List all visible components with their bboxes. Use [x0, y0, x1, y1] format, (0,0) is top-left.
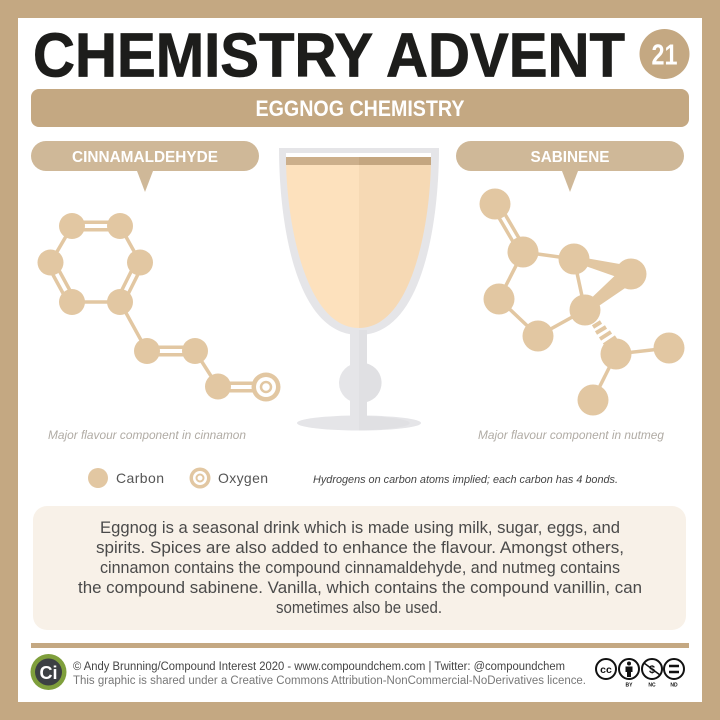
- description panel: the compound sabinene. Vanilla, which contains the compound vanillin, can: [78, 579, 642, 597]
- eggnog glass: [279, 148, 439, 430]
- icon: by: BY: [626, 682, 633, 688]
- logo: Ci: [40, 663, 58, 683]
- credits: This graphic is shared under a Creative Commons Attribution-NonCommercial-NoDerivatives licence.: [73, 675, 586, 687]
- icon: nd: ND: [670, 682, 678, 688]
- description panel: cinnamon contains the compound cinnamaldehyde, and nutmeg contains: [100, 559, 620, 577]
- legend: [88, 468, 618, 488]
- icon: nc: [642, 659, 662, 688]
- day number badge: [640, 29, 690, 79]
- icon: nc: $: [649, 664, 655, 676]
- caption: cinnamon: Major flavour component in cinnamon: [48, 430, 246, 442]
- icon: cc: cc: [600, 664, 612, 676]
- callout: cinnamaldehyde: [31, 141, 259, 192]
- legend note: Hydrogens on carbon atoms implied; each carbon has 4 bonds.: [313, 474, 618, 486]
- caption: nutmeg: Major flavour component in nutmeg: [478, 430, 665, 442]
- description panel: [33, 506, 686, 630]
- subtitle banner: EGGNOG CHEMISTRY: [256, 96, 465, 121]
- legend: carbon: [88, 468, 164, 488]
- licence icons: [596, 659, 684, 688]
- legend: oxygen: Oxygen: [218, 470, 268, 486]
- logo: [30, 654, 66, 690]
- molecule: sabinene: [480, 188, 684, 416]
- description panel: Eggnog is a seasonal drink which is made using milk, sugar, eggs, and: [100, 519, 620, 537]
- footer divider: [31, 643, 689, 648]
- description panel: sometimes also be used.: [276, 599, 442, 617]
- title: CHEMISTRY ADVENT: [33, 22, 625, 90]
- description panel: spirits. Spices are also added to enhance the flavour. Amongst others,: [96, 539, 624, 557]
- credits: [73, 661, 586, 687]
- molecule: cinnamaldehyde: [38, 213, 280, 402]
- callout: sabinene: [456, 141, 684, 192]
- oxygen atom: [252, 372, 280, 402]
- callout: cinnamaldehyde: CINNAMALDEHYDE: [72, 149, 218, 166]
- callout: sabinene: SABINENE: [530, 149, 610, 166]
- subtitle banner: [31, 89, 689, 127]
- legend: carbon: Carbon: [116, 470, 164, 486]
- credits: © Andy Brunning/Compound Interest 2020 - www.compoundchem.com | Twitter: @compoundchem: [73, 661, 565, 673]
- icon: nc: NC: [648, 682, 656, 688]
- day number badge: 21: [652, 40, 678, 72]
- legend: oxygen: [190, 468, 268, 488]
- liquid: [286, 157, 431, 328]
